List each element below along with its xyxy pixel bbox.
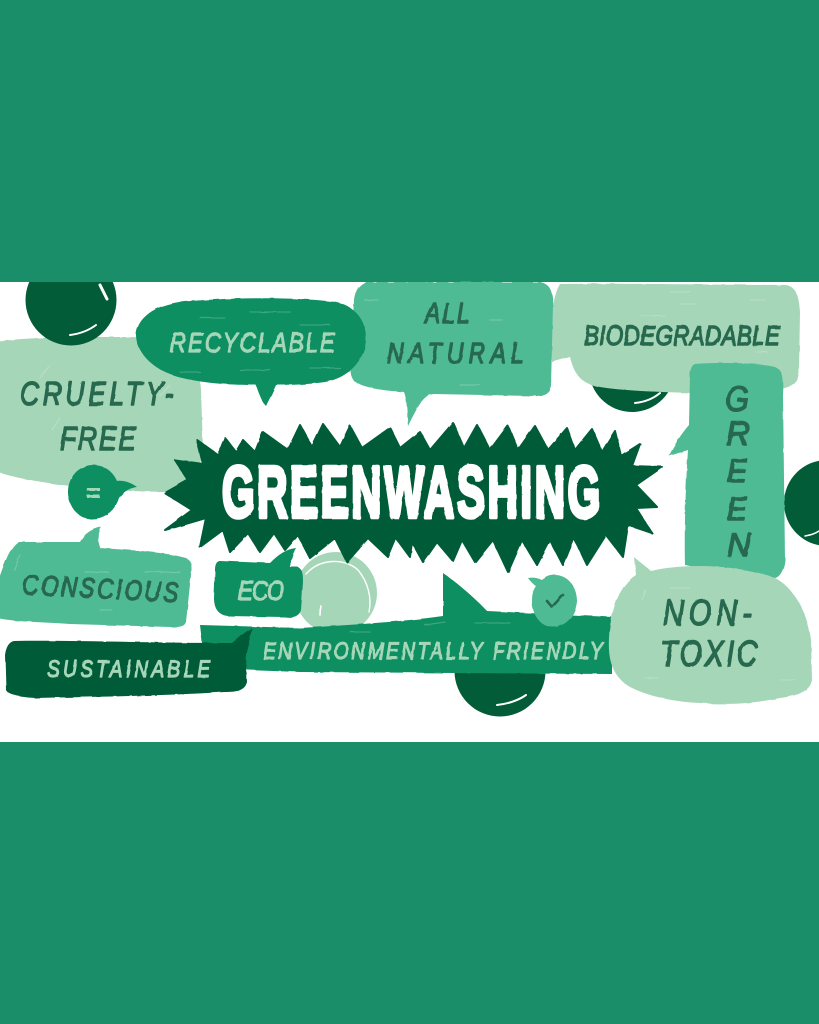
starburst with title <box>165 423 662 572</box>
speech bubble: green <box>669 363 785 578</box>
label: environmentally friendly: ENVIRONMENTALLY FRIENDLY <box>263 637 604 665</box>
label: free: FREE <box>60 421 137 458</box>
circle: dark top left <box>26 282 116 346</box>
icon: check <box>547 595 563 607</box>
speech bubble: sustainable <box>5 628 252 698</box>
speech bubble: eco <box>214 548 303 617</box>
speech bubble: biodegradable <box>551 284 800 393</box>
speech bubble: all natural <box>350 282 553 426</box>
title: greenwashing: GREENWASHING <box>222 453 600 533</box>
label: biodegradable: BIODEGRADABLE <box>584 321 781 352</box>
circle: dark below band <box>454 626 546 716</box>
label: all: ALL <box>423 296 470 330</box>
label: sustainable: SUSTAINABLE <box>47 655 211 683</box>
label: conscious: CONSCIOUS <box>22 570 179 609</box>
label: non-: NON- <box>663 592 752 633</box>
speech bubble: conscious <box>0 527 191 627</box>
label: eco: ECO <box>238 576 285 607</box>
speech bubble: equals icon <box>68 465 137 519</box>
label: green letters: G <box>725 380 749 419</box>
speech bubble: cruelty-free <box>0 337 203 492</box>
speech banner: environmentally friendly <box>200 573 612 674</box>
label: green letters <box>725 380 752 563</box>
circle: pale behind eco <box>295 552 377 634</box>
speech bubble: check mark <box>528 575 577 627</box>
infographic: greenwashing illustration on green background <box>0 282 819 742</box>
label: toxic: TOXIC <box>660 633 758 674</box>
white central panel <box>0 282 819 742</box>
label: recyclable: RECYCLABLE <box>170 328 336 359</box>
label: green letters: N <box>727 527 752 563</box>
circle: dark below biodegradable <box>589 326 675 412</box>
label: cruelty-: CRUELTY- <box>20 376 174 413</box>
speech bubble: recyclable <box>136 298 366 406</box>
circle: dark right edge <box>784 460 819 546</box>
label: green letters: E <box>727 491 748 527</box>
label: green letters: R <box>726 415 750 453</box>
label: natural: NATURAL <box>387 336 524 370</box>
label: green letters: E <box>727 453 748 489</box>
speech bubble: non-toxic <box>609 557 812 704</box>
